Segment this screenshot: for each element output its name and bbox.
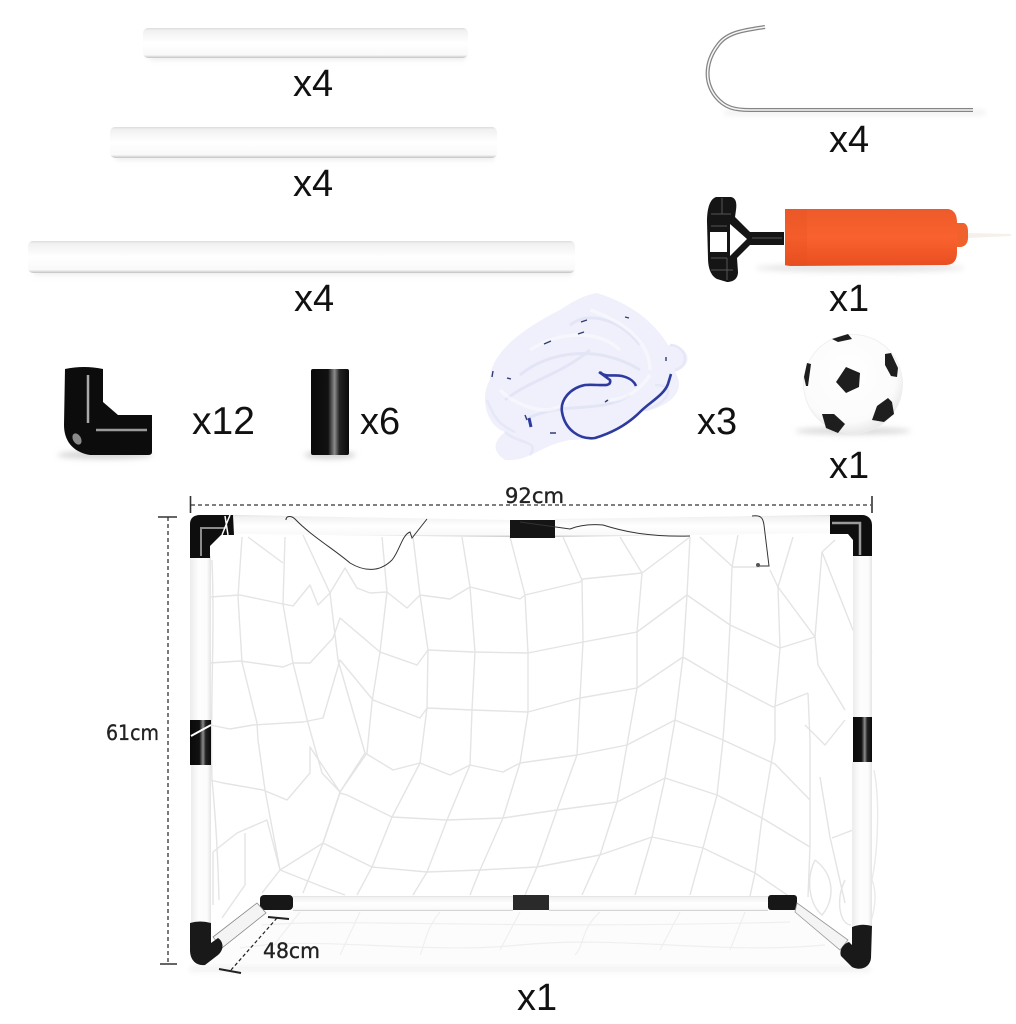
dimension: depth 48cm: 48cm bbox=[263, 939, 320, 963]
left side base tube bbox=[213, 903, 266, 948]
top crossbar bbox=[233, 515, 830, 538]
ball pentagons bbox=[804, 334, 898, 433]
icon: black straight connector with quantity: x6 bbox=[360, 401, 400, 443]
dimension: width 92cm bbox=[190, 484, 872, 513]
white tube, short, with quantity bbox=[143, 28, 468, 105]
pump nozzle bbox=[957, 223, 968, 247]
right side base tube bbox=[795, 903, 848, 950]
back bottom rail bbox=[260, 895, 797, 911]
left post bbox=[190, 556, 222, 965]
white tube, long, with quantity bbox=[28, 241, 575, 320]
white tube, medium, with quantity bbox=[110, 127, 497, 205]
icon: black elbow connector with quantity: x12 bbox=[192, 400, 255, 443]
wire cord right bbox=[520, 516, 769, 566]
icon: bundled netting with quantity: x3 bbox=[697, 401, 737, 443]
net mesh bbox=[210, 535, 878, 935]
white tube, medium, with quantity: x4 bbox=[293, 163, 333, 205]
pump handle bbox=[707, 197, 784, 282]
floor netting bbox=[240, 912, 825, 955]
floor shadow bbox=[190, 910, 870, 968]
icon: black straight connector with quantity bbox=[304, 369, 400, 459]
needle bbox=[968, 233, 1011, 238]
icon: bundled netting with quantity bbox=[485, 293, 737, 460]
dimension: height 61cm bbox=[106, 517, 177, 964]
dimension: width 92cm: 92cm bbox=[505, 484, 564, 508]
icon: orange air pump with quantity: x1 bbox=[829, 278, 869, 320]
pump body bbox=[785, 209, 957, 266]
quantity: goal: x1 bbox=[517, 977, 557, 1019]
blue cord bbox=[562, 372, 671, 438]
wire cord bbox=[286, 516, 427, 569]
icon: soccer ball with quantity bbox=[795, 334, 911, 487]
icon: orange air pump with quantity bbox=[707, 197, 1011, 320]
icon: ground stake hook with quantity bbox=[708, 27, 985, 161]
top right corner connector bbox=[830, 515, 872, 556]
goal assembly with net bbox=[190, 515, 878, 971]
icon: ground stake hook with quantity: x4 bbox=[829, 119, 869, 161]
right post bbox=[840, 556, 872, 969]
icon: black elbow connector with quantity bbox=[57, 367, 255, 459]
white tube, short, with quantity: x4 bbox=[293, 63, 333, 105]
dimension: height 61cm: 61cm bbox=[106, 721, 159, 745]
dimension: depth 48cm bbox=[219, 917, 320, 973]
icon: soccer ball with quantity: x1 bbox=[829, 445, 869, 487]
white tube, long, with quantity: x4 bbox=[294, 278, 334, 320]
top left corner connector bbox=[190, 515, 234, 558]
